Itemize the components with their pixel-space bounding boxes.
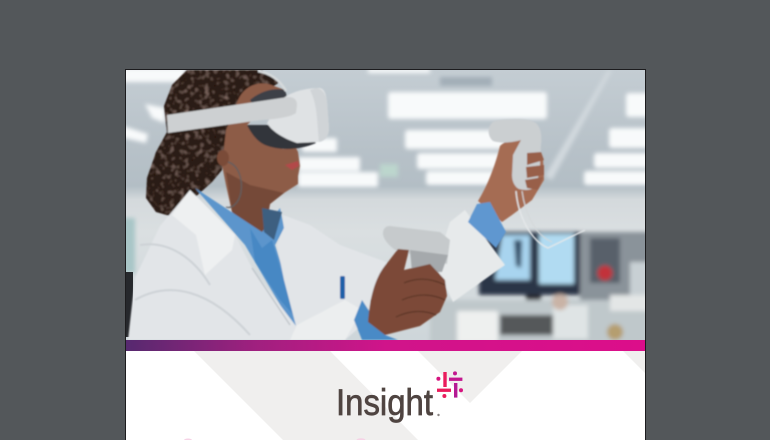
lower white panel (126, 351, 645, 440)
monitors (479, 232, 580, 295)
wordmark: Insight (336, 382, 434, 423)
far sleeve (436, 210, 505, 302)
lower left cuff (354, 300, 398, 340)
blue shirt (195, 188, 300, 326)
face and neck (222, 83, 300, 238)
hoop earring (226, 162, 241, 207)
Insight logo (336, 371, 463, 423)
card border (125, 69, 646, 440)
lab coat (128, 190, 388, 340)
registered dot (437, 414, 440, 416)
photo: woman in VR headset (120, 68, 656, 345)
pen in pocket (340, 276, 345, 299)
lab background (120, 68, 656, 345)
lower hand with controller (368, 226, 450, 335)
cover illustration page (125, 69, 646, 440)
desk area (430, 300, 650, 345)
gradient divider bar (126, 340, 645, 351)
raised hand with controller (468, 119, 585, 248)
partly visible headline tops (184, 438, 366, 440)
hair (146, 70, 280, 216)
headset (167, 71, 329, 149)
background chevrons (194, 351, 645, 440)
ceiling vent and diagonal beam (440, 77, 492, 86)
logo symbol (436, 371, 463, 398)
